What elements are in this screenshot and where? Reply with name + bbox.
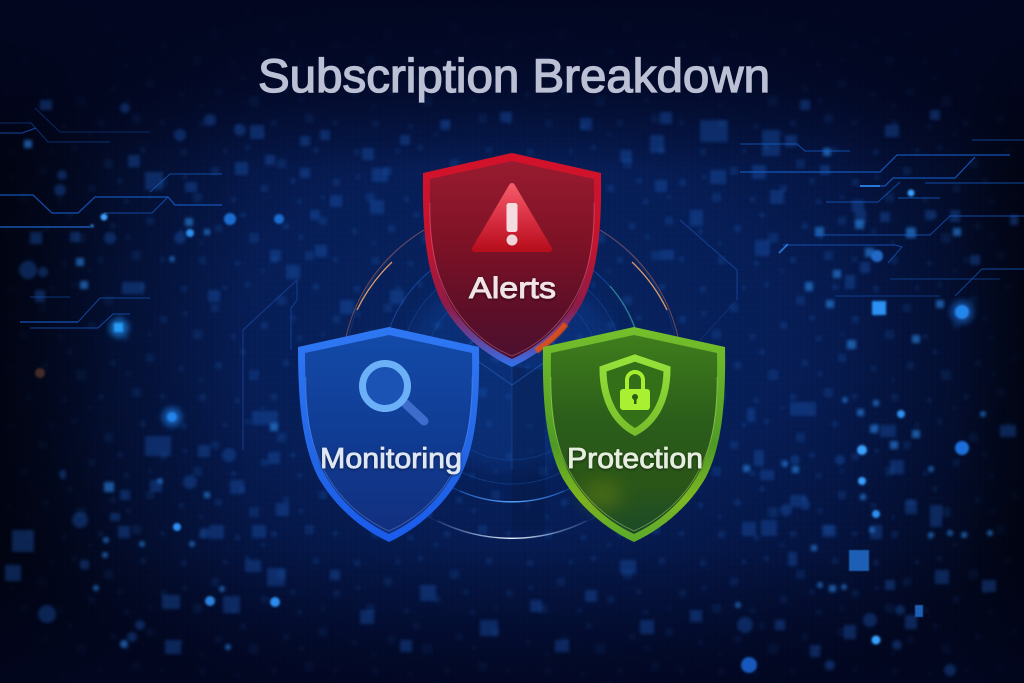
olive glow <box>582 481 622 509</box>
shield face <box>430 161 594 359</box>
icon: warning triangle <box>475 186 549 249</box>
label: Protection: Protection <box>567 443 703 475</box>
title: Subscription Breakdown <box>258 49 770 102</box>
shield border <box>423 153 601 367</box>
circuit traces: left <box>0 108 297 450</box>
label: Monitoring: Monitoring <box>320 443 462 475</box>
concentric rings <box>345 205 679 539</box>
icon: shield with padlock <box>603 358 667 432</box>
shield: Monitoring <box>298 327 479 542</box>
circuit traces: right <box>680 140 1024 340</box>
background particles: medium bright <box>24 140 993 650</box>
label: Alerts: Alerts <box>469 272 556 305</box>
shield border <box>543 327 725 542</box>
shield: Protection <box>543 327 725 542</box>
icon: magnifying glass <box>362 364 424 421</box>
circuit nodes: left <box>90 214 108 228</box>
inner highlight line <box>551 377 717 531</box>
inner highlight line <box>306 377 472 531</box>
shield border <box>298 327 479 542</box>
shield: Alerts <box>423 153 601 367</box>
central glow <box>402 270 622 530</box>
inner highlight line <box>430 203 594 356</box>
orange edge glow <box>536 324 566 351</box>
background particles: bright lights <box>35 190 974 673</box>
shield face <box>551 335 717 534</box>
shield face <box>305 335 472 534</box>
